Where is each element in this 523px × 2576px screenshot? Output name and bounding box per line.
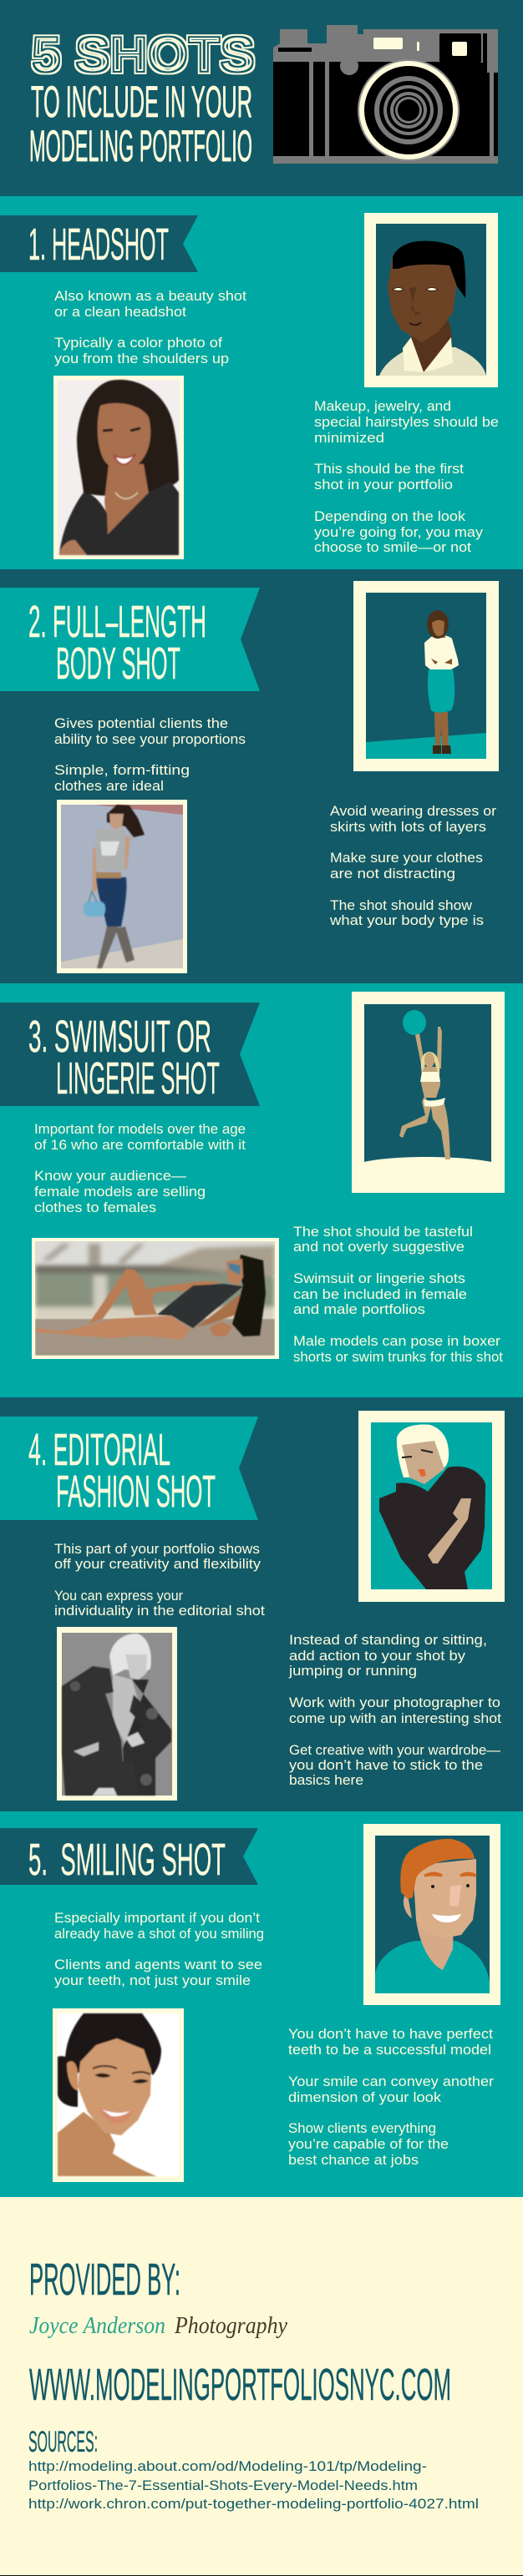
panel: 4 editorial fashion shot: [0, 1397, 523, 1811]
text block: editorial left: off your creativity and flexibility: [54, 1556, 262, 1572]
text block: headshot right: Makeup, jewelry, and: [314, 398, 451, 414]
text block: swimsuit left: female models are selling: [34, 1184, 206, 1200]
text block: full-length right: are not distracting: [330, 866, 455, 881]
text block: full-length right: skirts with lots of layers: [330, 819, 486, 835]
text block: headshot left: you from the shoulders up: [54, 351, 229, 366]
text block: full-length left: [54, 715, 246, 794]
text block: swimsuit left: of 16 who are comfortable with it: [34, 1137, 246, 1153]
text block: headshot left: or a clean headshot: [54, 304, 186, 320]
photo: reclining model on beach: [32, 1238, 279, 1359]
text block: full-length left: clothes are ideal: [54, 778, 164, 794]
panel: footer: [0, 2197, 523, 2576]
photo: woman headshot: [53, 376, 184, 559]
text block: smiling left: already have a shot of you smiling: [54, 1926, 264, 1942]
photo: full-length model: [57, 800, 187, 973]
text block: source links: [28, 2459, 479, 2512]
logo: Joyce Anderson Photography: [29, 2312, 287, 2339]
heading banner: 5. Smiling shot: [0, 1828, 258, 1885]
heading banner: 5. Smiling shot: 5. SMILING SHOT: [28, 1835, 226, 1885]
text block: smiling right: best chance at jobs: [288, 2152, 419, 2168]
text block: headshot right: choose to smile—or not: [314, 539, 471, 555]
text block: editorial left: You can express your: [54, 1588, 183, 1604]
panel: 3 swimsuit or lingerie shot: [0, 983, 523, 1397]
photo: editorial black and white: [57, 1627, 177, 1801]
text block: swimsuit right: shorts or swim trunks for this shot: [293, 1349, 503, 1365]
text block: full-length right: Make sure your clothes: [330, 850, 483, 866]
heading banner: 4. Editorial fashion shot: FASHION SHOT: [56, 1467, 216, 1517]
text block: full-length left: Simple, form-fitting: [54, 762, 190, 778]
text block: source links: http://modeling.about.com/od/Modeling-101/tp/Modeling-: [28, 2459, 427, 2474]
text block: headshot right: This should be the first: [314, 461, 464, 477]
text block: editorial right: Get creative with your wardrobe—: [289, 1742, 500, 1758]
heading banner: 1. Headshot: 1. HEADSHOT: [28, 220, 169, 270]
text block: editorial right: Instead of standing or sitting,: [289, 1632, 487, 1648]
text block: full-length right: what your body type is: [329, 912, 484, 928]
text block: editorial right: basics here: [289, 1772, 363, 1788]
heading banner: 2. Full-length body shot: 2. FULL–LENGTH: [28, 597, 206, 647]
heading banner: 4. Editorial fashion shot: [0, 1417, 258, 1520]
text block: smiling left: Clients and agents want to see: [54, 1957, 262, 1972]
illustration: male headshot: [364, 213, 498, 387]
text block: headshot right: minimized: [314, 430, 384, 446]
heading banner: 2. Full-length body shot: [0, 588, 260, 691]
text block: headshot left: Also known as a beauty shot: [54, 288, 246, 304]
text block: editorial right: Work with your photographer to: [289, 1695, 500, 1710]
heading banner: 4. Editorial fashion shot: 4. EDITORIAL: [28, 1425, 170, 1475]
text block: full-length right: The shot should show: [330, 897, 473, 913]
panel: footer: PROVIDED BY:: [29, 2255, 180, 2305]
text block: editorial left: This part of your portfolio shows: [54, 1541, 260, 1557]
text block: headshot left: [54, 288, 246, 366]
text block: smiling right: You don’t have to have perfect: [288, 2026, 493, 2042]
illustration: smiling man: [363, 1824, 500, 2005]
text block: swimsuit left: clothes to females: [34, 1200, 156, 1215]
panel: 1 headshot: [0, 196, 523, 569]
text block: smiling right: Show clients everything: [288, 2120, 436, 2136]
title: 5 SHOTS: [32, 27, 255, 83]
text block: swimsuit right: Swimsuit or lingerie shots: [293, 1270, 465, 1286]
title: [29, 27, 255, 171]
text block: editorial right: you don’t have to stick to the: [289, 1757, 483, 1773]
text block: editorial right: jumping or running: [288, 1663, 417, 1679]
text block: editorial left: individuality in the editorial shot: [54, 1603, 265, 1619]
text block: headshot right: special hairstyles should be: [314, 414, 499, 430]
text block: headshot right: you’re going for, you may: [314, 524, 484, 540]
heading banner: 3. Swimsuit or lingerie shot: 3. SWIMSUIT OR: [28, 1012, 211, 1062]
panel: footer: SOURCES:: [28, 2426, 98, 2458]
text block: swimsuit right: can be included in female: [293, 1286, 467, 1302]
text block: headshot right: [314, 398, 499, 555]
panel: 5 smiling shot: [0, 1811, 523, 2197]
text block: full-length left: ability to see your proportions: [54, 731, 246, 747]
header panel: TO INCLUDE IN YOUR: [31, 78, 252, 127]
photo: smiling woman: [53, 2008, 184, 2182]
text block: smiling right: teeth to be a successful model: [288, 2042, 491, 2058]
illustration: figure with beach ball: [352, 992, 505, 1193]
illustration: standing woman: [353, 581, 499, 771]
logo: Joyce Anderson Photography: Joyce Anderson: [29, 2312, 165, 2339]
text block: editorial right: come up with an interesting shot: [289, 1710, 501, 1726]
text block: swimsuit left: Important for models over the age: [34, 1121, 246, 1137]
text block: headshot right: shot in your portfolio: [314, 477, 453, 492]
text block: swimsuit right: [293, 1224, 503, 1365]
heading banner: 3. Swimsuit or lingerie shot: [0, 1003, 260, 1106]
header panel: [0, 0, 523, 196]
text block: smiling left: Especially important if you don’t: [54, 1910, 260, 1926]
text block: swimsuit left: [34, 1121, 246, 1215]
text block: full-length left: Gives potential clients the: [54, 715, 228, 731]
text block: editorial left: [54, 1541, 265, 1619]
text block: editorial right: add action to your shot by: [289, 1648, 466, 1664]
illustration: editorial woman in black coat: [358, 1411, 505, 1602]
logo: Joyce Anderson Photography: Photography: [174, 2312, 287, 2339]
text block: swimsuit left: Know your audience—: [34, 1168, 186, 1184]
heading banner: 1. Headshot: [0, 215, 198, 272]
text block: source links: Portfolios-The-7-Essential-Shots-Every-Model-Needs.htm: [28, 2478, 418, 2493]
text block: smiling right: [288, 2026, 494, 2168]
text block: smiling left: your teeth, not just your smile: [54, 1972, 251, 1988]
heading banner: 2. Full-length body shot: BODY SHOT: [56, 639, 180, 689]
text block: headshot right: Depending on the look: [314, 508, 466, 524]
text block: swimsuit right: and not overly suggestive: [293, 1239, 465, 1255]
text block: swimsuit right: and male portfolios: [293, 1301, 425, 1317]
text block: swimsuit right: The shot should be tasteful: [293, 1224, 473, 1240]
text block: full-length right: Avoid wearing dresses or: [330, 803, 496, 819]
text block: editorial right: [288, 1632, 501, 1788]
heading banner: 3. Swimsuit or lingerie shot: LINGERIE SHOT: [56, 1053, 220, 1104]
text block: smiling right: Your smile can convey another: [288, 2073, 494, 2089]
header panel: MODELING PORTFOLIO: [29, 122, 252, 171]
text block: source links: http://work.chron.com/put-together-modeling-portfolio-4027.html: [28, 2497, 479, 2512]
icon: camera: [273, 25, 498, 164]
text block: headshot left: Typically a color photo of: [54, 335, 222, 351]
text block: smiling left: [54, 1910, 264, 1988]
panel: 2 full-length body shot: [0, 569, 523, 983]
text block: smiling right: dimension of your look: [288, 2089, 442, 2105]
text block: swimsuit right: Male models can pose in boxer: [293, 1333, 500, 1349]
text block: full-length right: [329, 803, 496, 928]
text block: smiling right: you’re capable of for the: [288, 2136, 449, 2152]
